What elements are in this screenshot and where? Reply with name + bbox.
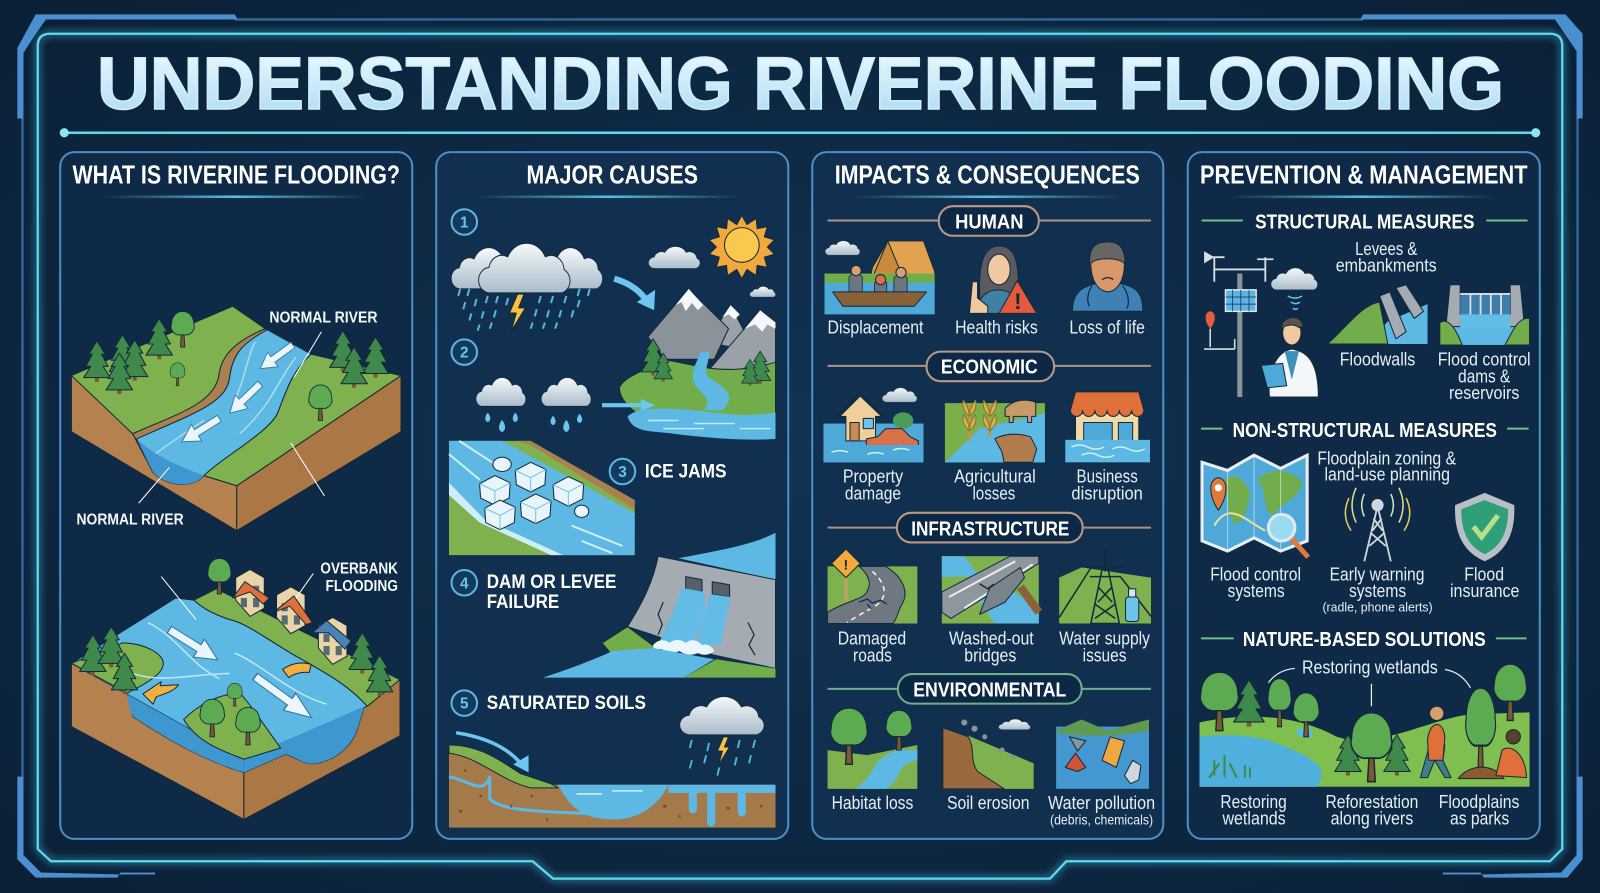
label: ice jams: 3 [618, 464, 627, 481]
number 1: 1 [460, 215, 469, 232]
label: damaged roads: roads [853, 644, 892, 665]
label: normal river top [269, 310, 378, 496]
label: early warning systems: Early warning [1330, 564, 1424, 585]
icon: soil erosion [943, 719, 1034, 789]
icon: warning tower [1345, 488, 1410, 561]
number 2: 2 [460, 345, 469, 362]
label: dam or levee failure: DAM OR LEVEE [487, 571, 616, 593]
section: nature-based solutions: NATURE-BASED SOLUTIONS [1243, 629, 1486, 651]
arrow: runoff to river [602, 399, 655, 411]
icon: health risks [969, 246, 1037, 314]
label: habitat loss: Habitat loss [832, 792, 913, 813]
label: water pollution [1048, 792, 1155, 828]
heading: impacts and consequences: IMPACTS & CONSEQUENCES [835, 162, 1140, 190]
label: restoring wetlands: Restoring [1220, 791, 1287, 812]
icon: sun [709, 215, 774, 279]
section pill: economic: ECONOMIC [941, 357, 1038, 379]
icon: agricultural losses [945, 400, 1045, 462]
label: water pollution: (debris, chemicals) [1050, 813, 1153, 828]
icon: insurance shield [1455, 493, 1514, 561]
label: damaged roads: Damaged [838, 627, 906, 648]
label: damaged roads [838, 627, 906, 665]
icon: flood control dam [1440, 285, 1530, 345]
label: washed-out bridges: bridges [964, 644, 1016, 665]
label: restoring wetlands callout: Restoring wetlands [1302, 657, 1438, 678]
label: floodplain zoning [1317, 447, 1456, 485]
label: flood insurance: Flood [1464, 564, 1504, 585]
label: restoring wetlands callout [1268, 657, 1470, 706]
label: loss of life: Loss of life [1069, 317, 1145, 338]
label: overbank flooding [161, 561, 398, 619]
icon: habitat loss [828, 708, 917, 789]
label: dam or levee failure: 4 [460, 575, 469, 592]
label: levees and embankments: embankments [1336, 254, 1437, 275]
label: washed-out bridges: Washed-out [949, 627, 1034, 648]
label: early warning systems: systems [1349, 580, 1406, 601]
panel: major causes [436, 152, 788, 839]
section pill: environmental [828, 674, 1151, 704]
label: floodplain zoning: land-use planning [1324, 464, 1450, 485]
icon: washed-out bridges [942, 556, 1039, 624]
label: agricultural losses [954, 466, 1036, 504]
heading: what is riverine flooding: WHAT IS RIVERINE FLOODING? [72, 162, 400, 190]
label: floodplains as parks: as parks [1450, 808, 1509, 829]
arrow: rain to mountains [614, 279, 655, 310]
icon: damaged roads: ! [844, 557, 848, 573]
label: overbank flooding: FLOODING [326, 578, 398, 595]
title rule [60, 128, 1540, 137]
icon: business disruption [1065, 392, 1150, 462]
label: flood control systems [1210, 564, 1301, 601]
panel: prevention and management [1188, 152, 1540, 839]
icon: rain cloud with lightning [680, 697, 764, 776]
label: levees and embankments: Levees & [1355, 238, 1417, 259]
label: restoring wetlands: wetlands [1222, 808, 1286, 829]
label: dam or levee failure: FAILURE [487, 591, 559, 613]
icon: map with pin and magnifier [1202, 455, 1308, 557]
label: flood insurance [1450, 564, 1519, 601]
label: floodplain zoning: Floodplain zoning & [1317, 447, 1456, 468]
diagram: overbank flooding block [71, 558, 400, 819]
label: normal river bottom: NORMAL RIVER [77, 512, 184, 529]
illustration: mountains and river [619, 289, 776, 440]
label: levees and embankments [1336, 238, 1437, 275]
section pill: human: HUMAN [955, 212, 1023, 234]
label: business disruption [1071, 466, 1143, 504]
label: water supply issues: issues [1083, 644, 1127, 665]
label: ice jams [610, 459, 727, 484]
label: property damage: damage [845, 483, 901, 504]
illustration: saturated soils [449, 733, 776, 828]
title: UNDERSTANDING RIVERINE FLOODING [97, 42, 1504, 125]
label: reforestation along rivers [1326, 791, 1418, 829]
icon: melting snow clouds [476, 378, 591, 432]
label: saturated soils: 5 [460, 696, 469, 713]
section pill: infrastructure [828, 513, 1151, 542]
heading: prevention and management: PREVENTION & MANAGEMENT [1200, 162, 1528, 190]
label: normal river bottom [77, 467, 184, 529]
label: saturated soils: SATURATED SOILS [487, 692, 646, 714]
section pill: economic [828, 352, 1151, 381]
illustration: dam failure [543, 533, 776, 678]
illustration: ice jams [449, 441, 635, 555]
icon: small clouds [648, 246, 776, 297]
label: water supply issues [1059, 627, 1151, 665]
illustration: nature-based landscape [1199, 664, 1530, 787]
label: early warning systems [1322, 564, 1433, 614]
number 2 [452, 339, 477, 365]
icon: displacement [824, 241, 935, 314]
label: business disruption: disruption [1071, 483, 1143, 504]
label: agricultural losses: Agricultural [954, 466, 1036, 487]
panel: impacts and consequences [812, 152, 1163, 839]
label: reforestation along rivers: along rivers [1331, 808, 1413, 829]
icon: damaged roads [828, 549, 917, 624]
icon: water supply issues [1059, 549, 1151, 624]
label: displacement: Displacement [828, 317, 923, 338]
label: early warning systems: (radle, phone alerts) [1322, 599, 1433, 614]
label: flood control dams and reservoirs: reservoirs [1449, 382, 1519, 403]
label: saturated soils [452, 690, 646, 716]
section: non-structural measures: NON-STRUCTURAL MEASURES [1233, 420, 1497, 442]
icon: monitoring station and scientist [1204, 251, 1318, 397]
heading: major causes: MAJOR CAUSES [527, 162, 698, 190]
label: soil erosion: Soil erosion [947, 792, 1030, 813]
label: water pollution: Water pollution [1048, 792, 1155, 813]
label: floodplains as parks: Floodplains [1439, 791, 1519, 812]
label: business disruption: Business [1077, 466, 1138, 487]
label: restoring wetlands [1220, 791, 1287, 829]
label: flood control systems: Flood control [1210, 564, 1301, 585]
label: property damage: Property [843, 466, 904, 487]
label: overbank flooding: OVERBANK [320, 561, 398, 578]
icon: water pollution [1056, 719, 1149, 789]
icon: storm clouds and rain [451, 243, 603, 333]
section: structural measures: STRUCTURAL MEASURES [1255, 212, 1474, 234]
label: flood insurance: insurance [1450, 580, 1519, 601]
label: reforestation along rivers: Reforestation [1326, 791, 1418, 812]
icon: loss of life [1072, 242, 1143, 311]
label: flood control systems: systems [1228, 580, 1285, 601]
section pill: human [828, 206, 1151, 236]
icon: property damage [823, 388, 923, 462]
label: washed-out bridges [949, 627, 1034, 665]
label: flood control dams and reservoirs [1438, 348, 1531, 403]
label: flood control dams and reservoirs: dams & [1458, 366, 1510, 387]
label: flood control dams and reservoirs: Flood control [1438, 348, 1531, 369]
label: ice jams: ICE JAMS [645, 461, 727, 483]
icon: floodwalls [1328, 285, 1428, 344]
section pill: infrastructure: INFRASTRUCTURE [911, 518, 1069, 540]
label: property damage [843, 466, 904, 504]
label: floodplains as parks [1439, 791, 1519, 829]
label: dam or levee failure [452, 570, 616, 613]
panel: what is riverine flooding [60, 152, 412, 839]
label: normal river top: NORMAL RIVER [269, 310, 378, 327]
number 1 [452, 209, 477, 235]
label: water supply issues: Water supply [1059, 627, 1151, 648]
icon: health risks: ! [1014, 289, 1022, 314]
label: floodwalls: Floodwalls [1340, 348, 1415, 369]
diagram: normal river block [71, 306, 401, 531]
label: health risks: Health risks [955, 317, 1038, 338]
section pill: environmental: ENVIRONMENTAL [913, 680, 1066, 702]
label: agricultural losses: losses [972, 483, 1015, 504]
